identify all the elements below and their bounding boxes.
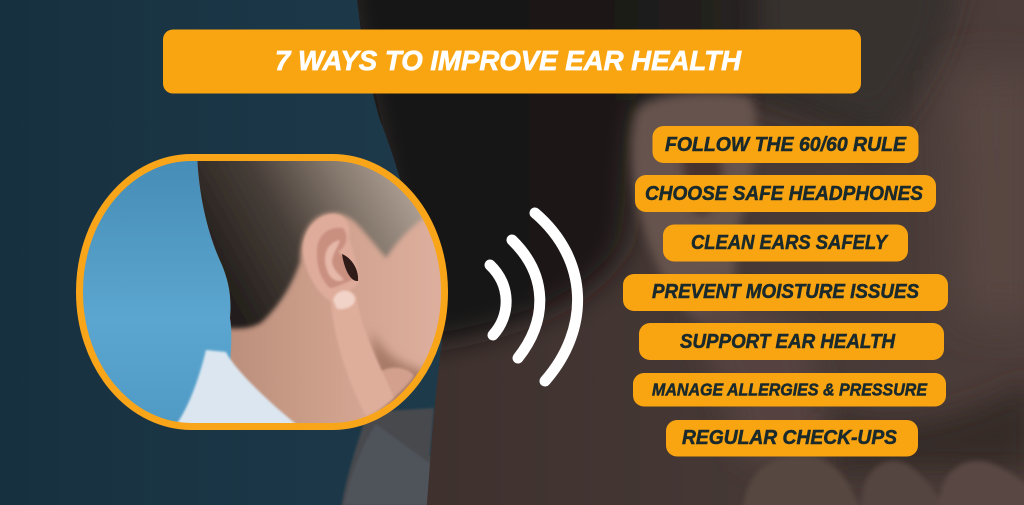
blurred finger on neck bbox=[701, 311, 821, 460]
list item: Regular check-ups bbox=[666, 420, 918, 456]
hair bbox=[197, 161, 424, 332]
list item: Follow the 60/60 rule: FOLLOW THE 60/60 RULE bbox=[665, 134, 907, 156]
finger bbox=[331, 290, 394, 416]
ear canal bbox=[342, 254, 358, 281]
chin shadow bbox=[830, 380, 1024, 470]
list item: Choose safe headphones bbox=[635, 175, 936, 212]
blurred ear bbox=[631, 92, 757, 330]
shirt collar bbox=[176, 350, 296, 432]
title banner: 7 WAYS TO IMPROVE EAR HEALTH bbox=[275, 45, 742, 76]
list item: Regular check-ups: REGULAR CHECK-UPS bbox=[682, 427, 898, 449]
list item: Manage allergies and pressure bbox=[633, 373, 946, 406]
ear inner shadow bbox=[678, 163, 726, 218]
thumb knuckle bbox=[380, 368, 414, 398]
list item: Prevent moisture issues bbox=[623, 274, 948, 311]
icon: ear bbox=[303, 214, 358, 302]
title banner bbox=[163, 30, 861, 94]
list item: Follow the 60/60 rule bbox=[652, 126, 918, 163]
circular photo: man pointing to his ear bbox=[76, 140, 450, 440]
large hair area bbox=[340, 0, 960, 345]
icon: sound waves bbox=[490, 213, 578, 381]
list item: Support ear health: SUPPORT EAR HEALTH bbox=[680, 331, 896, 353]
skin of neck and face bbox=[197, 161, 441, 423]
list item: Clean ears safely bbox=[663, 224, 908, 262]
blurred fingers bottom right bbox=[742, 456, 862, 505]
shirt collar bbox=[341, 408, 434, 505]
jaw shadow and under chin bbox=[370, 334, 422, 410]
head and neck skin bbox=[340, 0, 1024, 505]
list item: Manage allergies and pressure: MANAGE ALLERGIES & PRESSURE bbox=[652, 380, 928, 400]
list item: Choose safe headphones: CHOOSE SAFE HEADPHONES bbox=[645, 183, 924, 205]
list item: Support ear health bbox=[639, 323, 944, 360]
list item: Clean ears safely: CLEAN EARS SAFELY bbox=[691, 232, 889, 254]
list item: Prevent moisture issues: PREVENT MOISTURE ISSUES bbox=[652, 281, 920, 303]
cheek light bbox=[956, 76, 1024, 314]
hair right of the ear, soft fringe bbox=[762, 0, 866, 98]
